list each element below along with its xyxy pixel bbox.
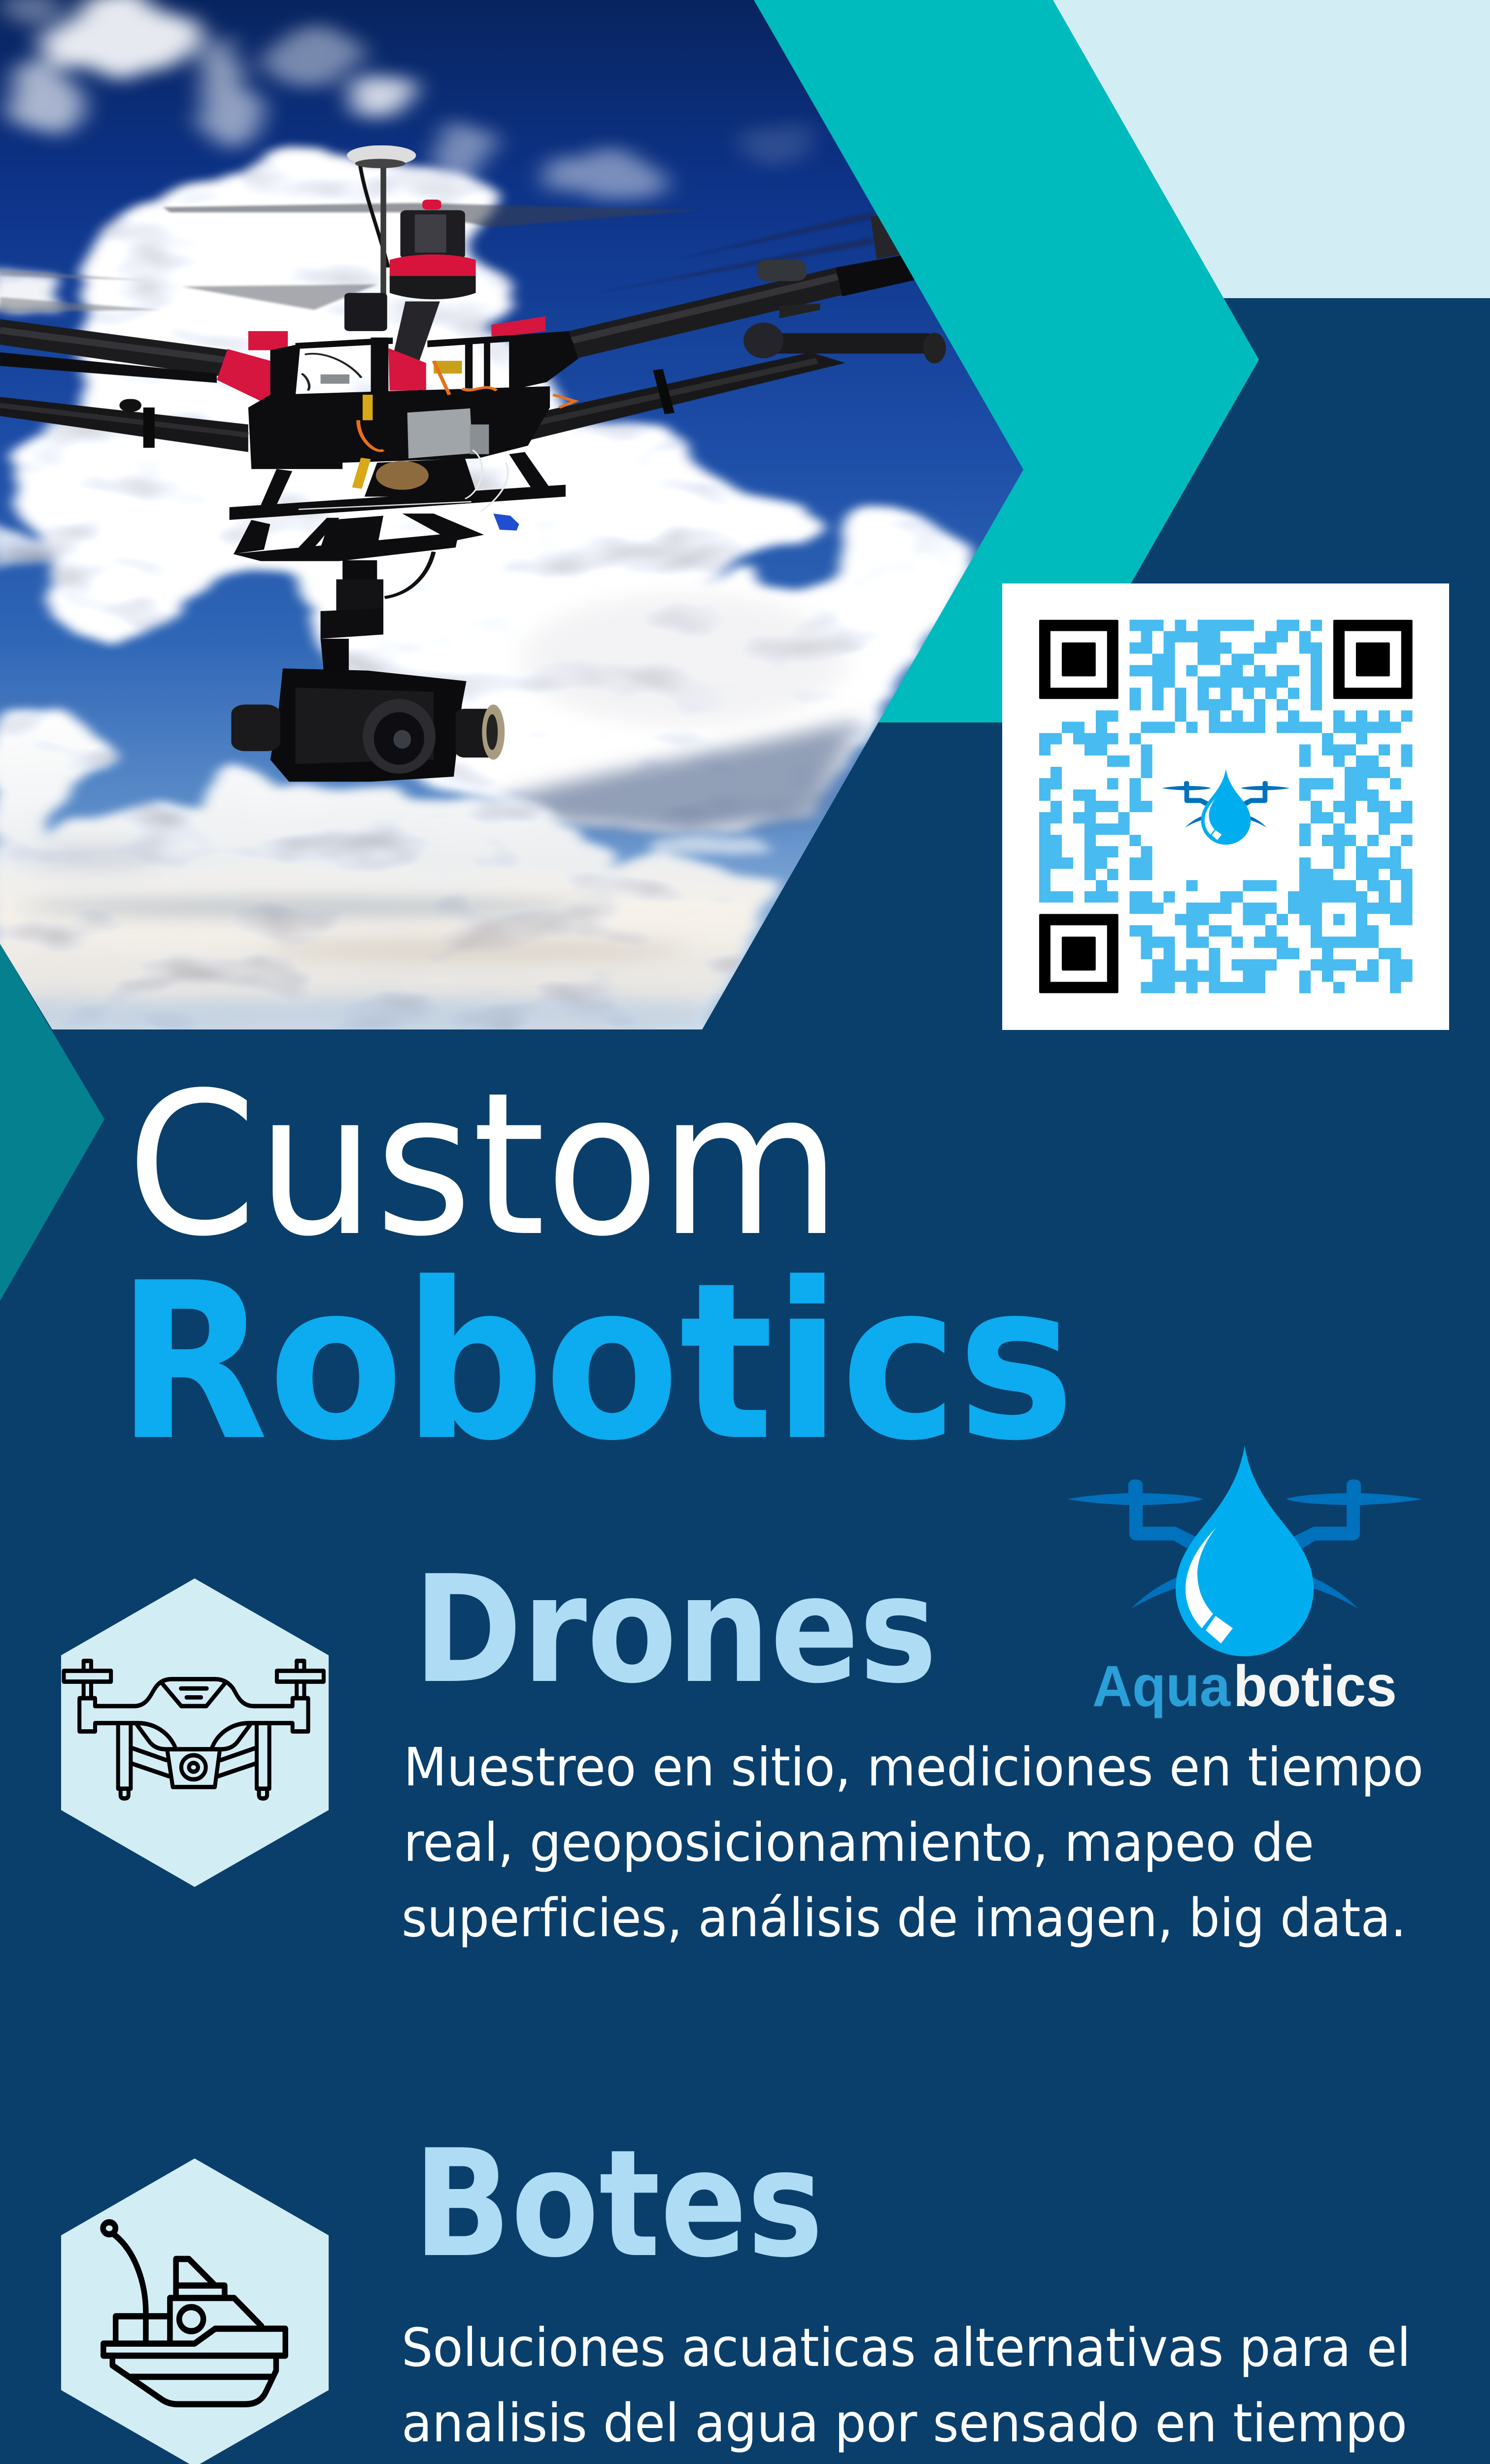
red brackets — [217, 349, 270, 401]
QR center logo — [1162, 769, 1290, 845]
camera — [270, 668, 466, 782]
light blue corner panel — [1035, 0, 1490, 298]
QR finder patterns — [1039, 620, 1413, 993]
back motor — [344, 293, 387, 331]
icon: boat hexagon — [61, 2158, 329, 2464]
text block: Drones description: superficies, análisis de imagen, big data. — [402, 1888, 1406, 1949]
title: Robotics: Robotics — [117, 1236, 1075, 1488]
text block: Botes description: analisis del agua por sensado en tiempo — [402, 2393, 1407, 2454]
text block: Drones description: real, geoposicionamiento, mapeo de — [404, 1813, 1314, 1874]
left dark teal chevron — [0, 944, 104, 1301]
icon: drone hexagon — [61, 1578, 329, 1887]
folded grip — [773, 333, 933, 354]
text block: Drones description: Muestreo en sitio, mediciones en tiempo — [404, 1737, 1423, 1798]
title: Custom: Custom — [127, 1051, 841, 1280]
heading: Drones: Drones — [413, 1544, 937, 1716]
propeller blur — [0, 203, 874, 312]
central frame — [230, 331, 578, 561]
Aquabotics logo — [1067, 1445, 1422, 1719]
photo: drone flying among clouds — [0, 0, 1035, 1036]
top motor — [400, 210, 465, 259]
logo wordmark: botics — [1233, 1654, 1397, 1719]
text block: Drones description — [402, 1737, 1423, 1949]
arms — [0, 319, 231, 378]
QR code card — [1002, 583, 1449, 1030]
clouds — [0, 0, 971, 1036]
QR data modules — [1039, 620, 1413, 993]
teal chevron — [754, 0, 1259, 722]
antenna — [360, 161, 388, 268]
gimbal neck — [342, 560, 377, 582]
drone — [0, 145, 946, 782]
logo wordmark: Aqua — [1092, 1654, 1231, 1719]
logo water drop — [1176, 1445, 1314, 1656]
text block: Botes description — [402, 2318, 1411, 2464]
wires — [358, 361, 575, 451]
logo drone arms — [1067, 1479, 1422, 1608]
text block: Botes description: Soluciones acuaticas alternativas para el — [402, 2318, 1411, 2379]
heading: Botes: Botes — [413, 2118, 823, 2290]
